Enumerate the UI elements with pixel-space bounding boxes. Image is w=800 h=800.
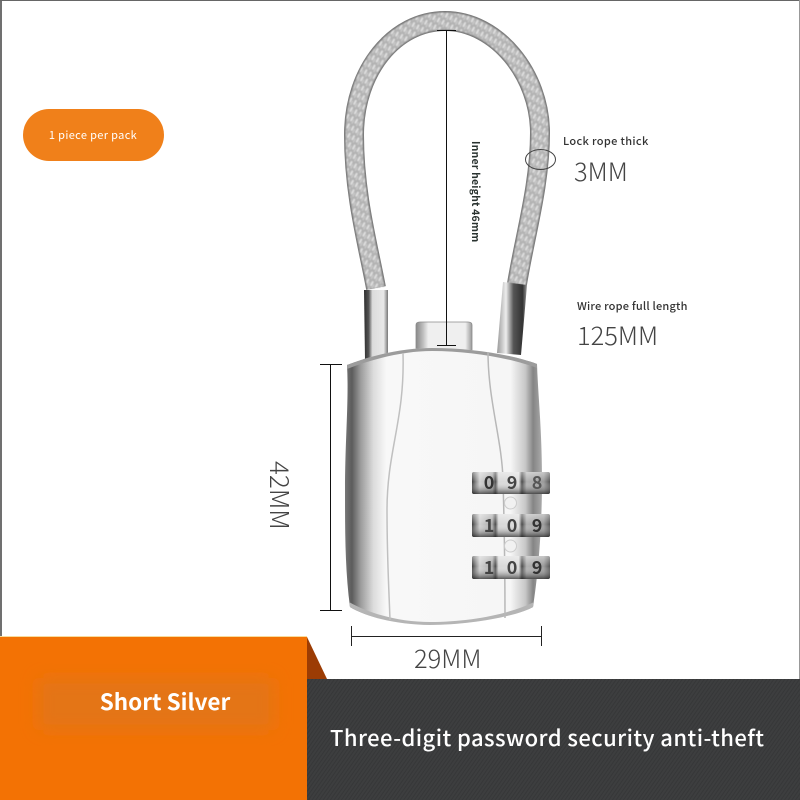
- value: 125MM: 125MM: [577, 316, 658, 353]
- dark banner: Three-digit password security anti-theft: [330, 721, 764, 753]
- centre post: [416, 322, 472, 352]
- combination wheel bottom: [472, 554, 550, 580]
- fold shadow: [307, 637, 327, 679]
- top page edge: [0, 0, 800, 1]
- dimension: body height: [320, 364, 342, 610]
- rope thickness ring: [526, 150, 556, 170]
- left ferrule: [364, 290, 388, 360]
- combination wheel bottom: 1: [484, 554, 494, 580]
- orange banner: Short Silver: [100, 685, 230, 717]
- combination wheel middle: 0: [507, 512, 517, 538]
- label: 42MM: 42MM: [262, 461, 299, 530]
- value: 3MM: 3MM: [574, 152, 628, 189]
- combination wheel top: 8: [532, 469, 542, 495]
- combination wheel top: 9: [507, 469, 517, 495]
- label: lock rope thick: Lock rope thick: [563, 133, 649, 149]
- body seam right: [488, 352, 505, 618]
- badge: 1 piece per pack: 1 piece per pack: [49, 127, 137, 143]
- dark banner: [307, 679, 800, 800]
- dimension: body width: [351, 626, 542, 646]
- lock body: [345, 348, 542, 625]
- badge: 1 piece per pack: [23, 109, 164, 161]
- body seam left: [387, 353, 403, 620]
- left page edge: [0, 0, 2, 800]
- dimension: inner height: [437, 30, 456, 346]
- orange banner: [0, 636, 307, 800]
- combination wheel middle: 1: [484, 512, 494, 538]
- combination wheel middle: 9: [532, 512, 542, 538]
- label: wire rope full length: Wire rope full length: [577, 298, 688, 314]
- combination wheel top: [472, 469, 550, 495]
- combination wheel top: 0: [484, 469, 494, 495]
- right page edge: [799, 0, 800, 800]
- label: 29MM: 29MM: [414, 639, 481, 676]
- combination wheel middle: [472, 512, 550, 538]
- combination wheel bottom: 9: [532, 554, 542, 580]
- wire rope shackle: [354, 21, 540, 288]
- right ferrule: [497, 282, 527, 355]
- label: inner height: Inner height 46mm: [468, 141, 483, 242]
- indicator dots: [504, 497, 516, 509]
- combination wheel bottom: 0: [507, 554, 517, 580]
